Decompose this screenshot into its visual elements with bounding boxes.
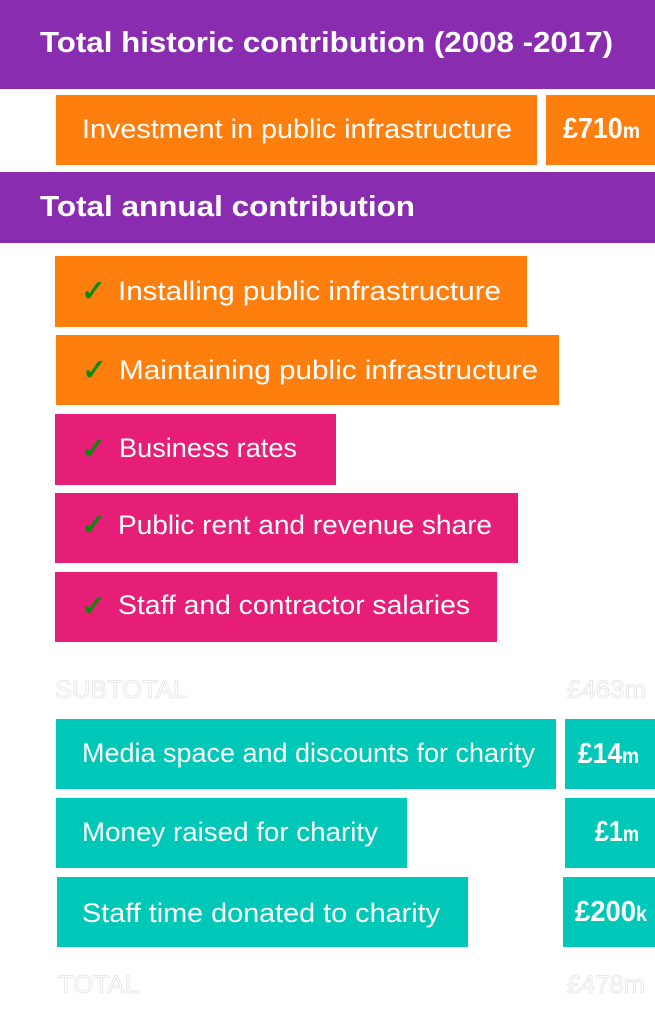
row: media space and discounts for charity: Media space and discounts for charity	[82, 738, 535, 768]
value: £710m	[546, 95, 655, 165]
row: staff time donated to charity	[57, 877, 468, 947]
row: staff and contractor salaries: ✓	[81, 589, 106, 624]
row: public rent and revenue share: Public rent and revenue share	[118, 510, 492, 540]
row: maintaining public infrastructure: Maintaining public infrastructure	[119, 355, 538, 385]
value: £200k: £200k	[575, 896, 647, 928]
row: installing public infrastructure	[55, 256, 527, 327]
value: £1m	[565, 798, 655, 868]
row: staff and contractor salaries: Staff and contractor salaries	[118, 590, 470, 620]
value: £14m	[565, 719, 655, 789]
label: total: TOTAL	[58, 971, 139, 999]
value: £478m: £478m	[567, 971, 645, 999]
value: £200k	[563, 877, 655, 947]
value: £14m: £14m	[578, 738, 639, 770]
heading: total historic contribution	[0, 0, 655, 89]
heading: total annual contribution: Total annual contribution	[40, 191, 415, 223]
row: installing public infrastructure: ✓	[81, 274, 106, 309]
row: installing public infrastructure: Installing public infrastructure	[118, 276, 501, 306]
row: maintaining public infrastructure: ✓	[82, 353, 107, 388]
value: £463m: £463m	[567, 676, 646, 704]
row: public rent and revenue share: ✓	[81, 508, 106, 543]
row: investment in public infrastructure	[56, 95, 537, 165]
row: money raised for charity: Money raised for charity	[82, 817, 379, 847]
heading: total annual contribution	[0, 172, 655, 243]
value: £1m: £1m	[595, 816, 639, 848]
row: staff and contractor salaries	[55, 572, 497, 642]
row: business rates: Business rates	[119, 433, 297, 463]
row: business rates	[55, 414, 336, 485]
heading: total historic contribution: Total historic contribution (2008 -2017)	[40, 27, 613, 59]
value: £710m: £710m	[563, 113, 640, 145]
row: maintaining public infrastructure	[56, 335, 559, 405]
row: public rent and revenue share	[55, 493, 518, 563]
row: investment in public infrastructure: Investment in public infrastructure	[82, 114, 512, 144]
label: subtotal: SUBTOTAL	[55, 676, 187, 704]
row: money raised for charity	[56, 798, 407, 868]
row: staff time donated to charity: Staff time donated to charity	[82, 898, 441, 928]
row: media space and discounts for charity	[56, 719, 556, 789]
row: business rates: ✓	[81, 432, 106, 467]
